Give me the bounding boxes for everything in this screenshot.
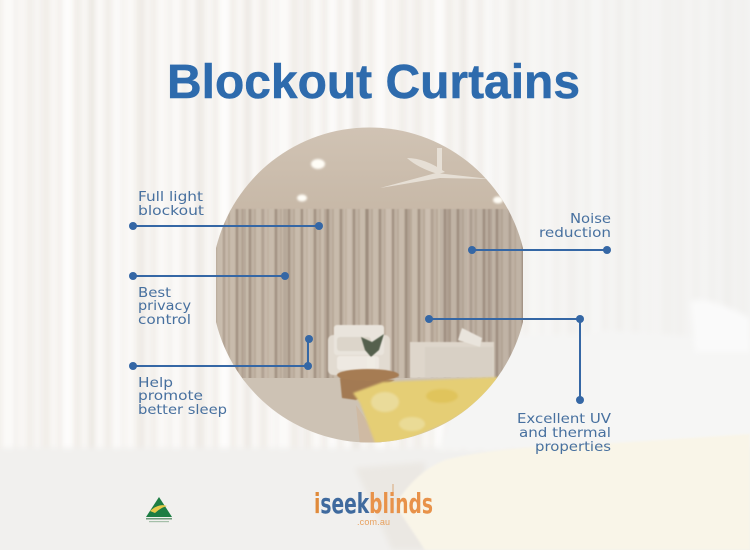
callout: full light blockout [129,189,323,230]
circular room photo [216,128,523,442]
callout: full light blockout: blockout [138,203,205,219]
sofa [410,328,494,378]
callout: excellent UV and thermal properties: and thermal [519,425,611,441]
callout: full light blockout: Full light [138,189,204,205]
title: Blockout Curtains [167,56,580,109]
callout: best privacy control [129,272,289,328]
callout: excellent UV and thermal properties: properties [535,439,611,455]
callout: help promote better sleep: promote [138,388,203,404]
logo: iseekblinds.com.au [314,484,433,527]
callout: noise reduction: reduction [539,225,611,241]
callout: help promote better sleep [129,335,313,418]
yellow bedspread [353,377,502,443]
floor [242,378,494,442]
callout: help promote better sleep: Help [138,375,173,391]
callout: best privacy control: Best [138,285,172,301]
curtains [210,209,530,381]
callout: noise reduction [468,211,611,254]
logo: iseekblinds.com.au: .com.au [357,517,390,527]
armchair [328,325,390,375]
callout: best privacy control: privacy [138,298,191,314]
coffee table [337,369,399,400]
plant [360,334,384,358]
callout: excellent UV and thermal properties: Excellent UV [517,411,612,427]
bed base [356,406,382,442]
downlights [297,159,503,204]
icon: Australian Made logo [146,497,172,522]
callout: noise reduction: Noise [570,211,611,227]
callout: help promote better sleep: better sleep [138,402,227,418]
ceiling [230,128,510,212]
ceiling fan [380,148,490,188]
callout: excellent UV and thermal properties [425,315,612,455]
logo: iseekblinds.com.au: iseekblinds [314,487,433,520]
callout: best privacy control: control [138,312,191,328]
